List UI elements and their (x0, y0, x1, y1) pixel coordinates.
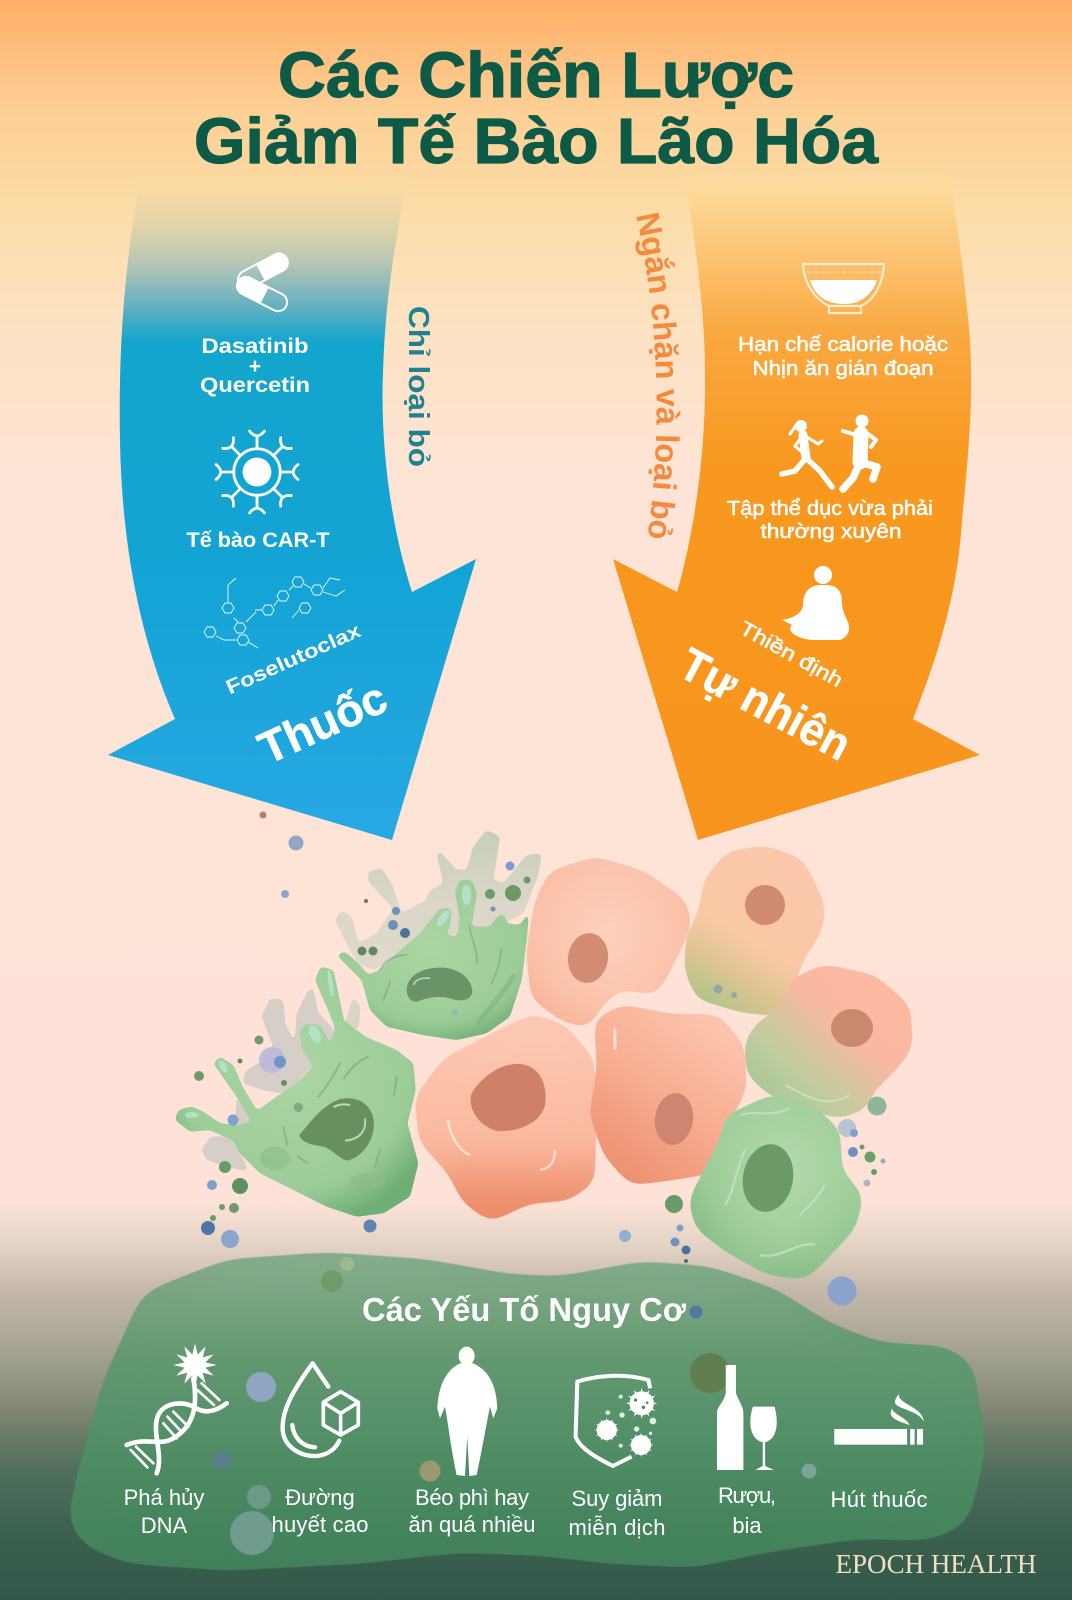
label: Thuốc: Thuốc (251, 672, 395, 774)
logo: Epoch Health: EPOCH HEALTH (836, 1549, 1036, 1579)
label: Dasatinib + Quercetin (200, 335, 310, 397)
label: alcohol: Rượu, (718, 1483, 776, 1508)
label: obesity: ăn quá nhiều (408, 1512, 536, 1537)
label: high blood sugar (272, 1485, 368, 1537)
cell: green senescent top (337, 880, 529, 1040)
label: moderate exercise: thường xuyên (760, 521, 902, 543)
icon: blood sugar drop (283, 1363, 358, 1456)
label: Dasatinib + Quercetin: Quercetin (200, 374, 310, 397)
icon: runners (782, 414, 877, 489)
debris dots (194, 812, 886, 1306)
icon: bottle and glass (717, 1365, 777, 1470)
icon: immune shield (576, 1376, 658, 1466)
label: moderate exercise (727, 498, 933, 543)
label: calorie restriction: Hạn chế calorie hoặc (738, 334, 948, 356)
label: calorie restriction: Nhịn ăn gián đoạn (752, 358, 934, 380)
title: Giảm Tế Bào Lão Hóa (194, 105, 878, 177)
label: smoking: Hút thuốc (830, 1487, 928, 1512)
cell: green senescent lower-left (175, 967, 418, 1217)
label: Foselutoclax: Foselutoclax (223, 620, 364, 699)
label: weakened immunity: Suy giảm (572, 1486, 662, 1511)
cell: pink top right (684, 846, 825, 1016)
label: calorie restriction (738, 334, 948, 380)
label: high blood sugar: huyết cao (272, 1512, 368, 1537)
panel: natural arrow (613, 165, 980, 840)
label: obesity (408, 1485, 536, 1537)
label: alcohol: bia (732, 1513, 762, 1538)
arrow: blue (108, 165, 476, 840)
label: moderate exercise: Tập thể dục vừa phải (727, 498, 933, 520)
panel background blob (68, 1253, 985, 1570)
label: DNA damage (124, 1485, 204, 1538)
icon: capsules (234, 250, 291, 314)
floating dots on panel (212, 1257, 816, 1555)
icon: obese figure (437, 1347, 497, 1476)
label: weakened immunity (568, 1486, 666, 1540)
label: DNA damage: DNA (141, 1513, 188, 1538)
icon: DNA damage (127, 1343, 227, 1473)
icon: bowl (802, 264, 885, 313)
icon: cigarette (834, 1394, 924, 1445)
panel: risk factors (68, 1253, 985, 1570)
label: alcohol (718, 1483, 776, 1538)
heading: risk factors: Các Yếu Tố Nguy Cơ (362, 1291, 687, 1328)
icon: meditation (782, 566, 849, 640)
label: obesity: Béo phì hay (415, 1485, 529, 1510)
arrow: orange (613, 165, 980, 840)
cell: pink top centre (527, 857, 691, 1028)
label: weakened immunity: miễn dịch (568, 1515, 666, 1540)
cell: pink-green right (745, 965, 912, 1118)
cells cluster (175, 812, 912, 1306)
label: high blood sugar: Đường (285, 1485, 355, 1510)
panel: medicine arrow (108, 165, 476, 840)
label: only removes: Chỉ loại bỏ (402, 306, 434, 467)
title (194, 39, 878, 177)
label: DNA damage: Phá hủy (124, 1485, 204, 1510)
cell ghost splashes (202, 830, 542, 1172)
cell: pink centre right (590, 1005, 746, 1185)
label: Dasatinib + Quercetin: + (249, 355, 261, 378)
label: Dasatinib + Quercetin: Dasatinib (202, 335, 308, 358)
label: natural: Tự nhiên (671, 637, 860, 770)
cell: pink centre large (415, 1014, 596, 1222)
cell: green lower right (689, 1095, 863, 1279)
icon: CAR-T cell (216, 431, 298, 513)
title: Các Chiến Lược (278, 39, 794, 111)
label: prevents and removes: Ngắn chặn và loại bỏ (635, 212, 680, 538)
label: meditation: Thiền định (736, 617, 846, 692)
label: CAR-T: Tế bào CAR-T (186, 529, 330, 552)
icon: molecule (204, 577, 345, 648)
